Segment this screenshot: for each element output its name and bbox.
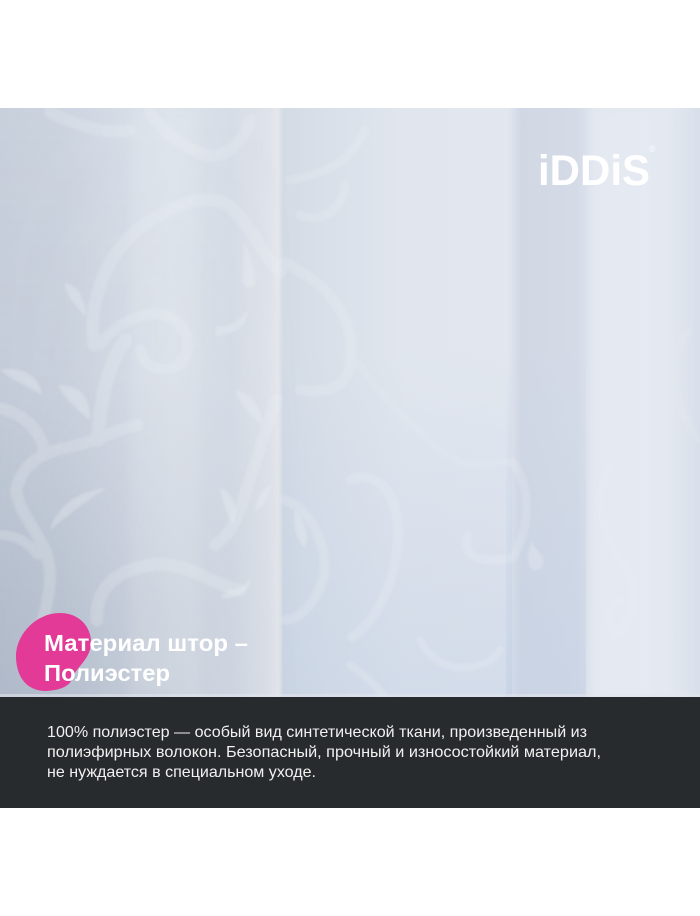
logo: IDDIS: ® — [649, 144, 656, 154]
text block: description: не нуждается в специальном уходе. — [47, 764, 316, 781]
infographic canvas — [0, 108, 700, 808]
bottom soft fold highlight — [130, 110, 650, 700]
logo: IDDIS: iDDiS — [538, 147, 650, 195]
title: Полиэстер — [44, 660, 170, 686]
panel: description — [0, 697, 700, 808]
text block: description — [47, 724, 601, 781]
title — [44, 630, 248, 686]
curtain photo panel — [0, 108, 700, 700]
icon: pink accent blob — [16, 613, 91, 691]
curtain damask vine pattern — [0, 404, 284, 626]
text block: description: полиэфирных волокон. Безопасный, прочный и износостойкий материал, — [47, 744, 601, 761]
text block: description: 100% полиэстер — особый вид синтетической ткани, произведенный из — [47, 724, 587, 741]
curtain damask leaf shapes — [2, 284, 542, 597]
title: Материал штор – — [44, 630, 248, 656]
